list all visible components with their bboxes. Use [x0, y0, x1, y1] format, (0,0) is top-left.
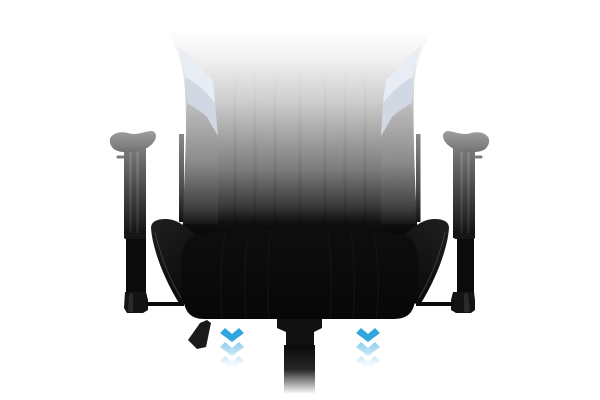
arm bracket: [416, 302, 454, 306]
arm knob: [474, 156, 482, 158]
seat tilt lever: [188, 320, 211, 349]
right armrest: [416, 131, 489, 313]
backrest pleats: [235, 60, 365, 228]
right light panel: [381, 45, 421, 136]
arm post upper: [453, 148, 475, 238]
seat pleats: [221, 231, 378, 318]
arm knob: [116, 156, 124, 158]
arm post lower: [457, 236, 474, 294]
arrow 1: [356, 328, 380, 342]
arm post upper: [124, 148, 146, 238]
arm post lower: [126, 236, 146, 294]
arrow 2: [220, 342, 244, 356]
arrow 3: [220, 356, 244, 369]
right down arrows: [356, 328, 380, 369]
backrest body: [166, 30, 434, 240]
right carbon strip: [381, 103, 416, 224]
left down arrows: [220, 328, 244, 369]
arrow 1: [220, 328, 244, 342]
seat cushion: [181, 229, 418, 319]
chair pole: [277, 316, 322, 395]
side supports: [179, 134, 420, 222]
chair backrest: [166, 30, 434, 240]
arrow 2: [356, 342, 380, 356]
left armrest: [110, 131, 184, 313]
arm base: [451, 292, 475, 313]
arm pad: [110, 131, 156, 152]
right seat wing: [404, 219, 449, 306]
left light panel: [177, 45, 218, 136]
arm bracket: [146, 302, 184, 306]
arm base: [124, 292, 148, 313]
arm pad: [443, 131, 489, 152]
left carbon strip: [183, 103, 218, 224]
left seat wing: [151, 219, 196, 306]
arrow 3: [356, 356, 380, 369]
